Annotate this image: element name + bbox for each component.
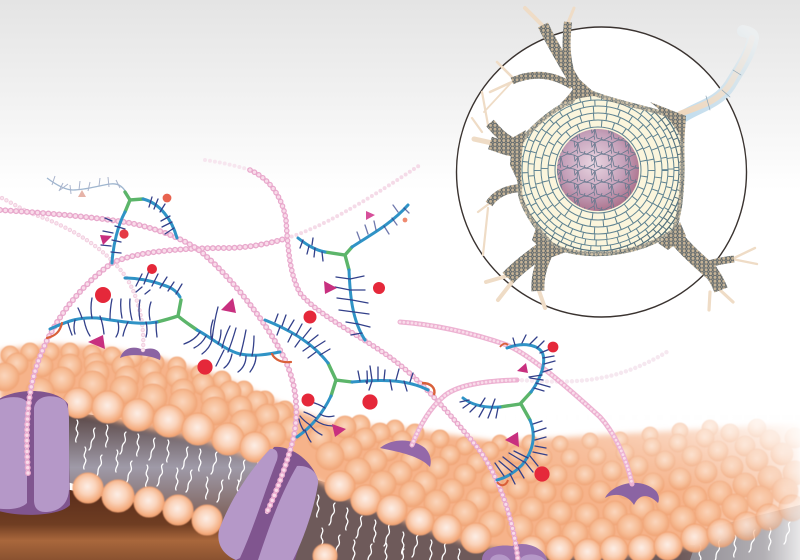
back lipid heads <box>0 343 800 547</box>
lipid tail region <box>60 410 800 560</box>
red ball <box>163 194 171 202</box>
strand six <box>412 380 517 445</box>
cytoplasm under membrane <box>0 490 250 560</box>
clasp <box>47 323 62 338</box>
body rim mesh <box>515 84 685 256</box>
neuron cell body <box>515 84 685 256</box>
red ball <box>147 264 157 274</box>
neuron dendrite tips <box>472 8 757 310</box>
clasp <box>500 344 508 347</box>
faint markers <box>78 190 86 197</box>
neuron dendrites <box>489 22 734 291</box>
lipid tails <box>76 420 790 560</box>
inset circle <box>456 27 746 317</box>
inset: neuron in circle <box>456 8 757 317</box>
magenta triangle <box>332 424 346 437</box>
red ball <box>119 229 129 239</box>
red ball <box>95 287 111 303</box>
red ball <box>362 394 378 410</box>
red ball <box>302 394 314 406</box>
dome protein 3 <box>605 483 659 505</box>
faded beaded strand ends <box>205 160 670 382</box>
glycoprotein A (top left) <box>47 176 177 263</box>
neuron corner flares <box>510 78 686 258</box>
neuron cytoplasm mesh <box>516 90 685 256</box>
red ball <box>197 359 213 375</box>
magenta triangle <box>100 235 112 245</box>
strand four <box>250 170 518 560</box>
faint red ball <box>403 218 407 222</box>
membrane surface backing <box>0 344 800 556</box>
magenta triangle <box>505 432 519 447</box>
faint markers <box>366 211 375 220</box>
channel protein 2 <box>218 447 318 560</box>
neuron nucleus <box>557 129 639 211</box>
channel protein 3 <box>482 544 547 560</box>
strand one <box>0 197 143 350</box>
clasp <box>422 383 434 395</box>
strand two <box>27 238 287 473</box>
magenta triangle <box>517 363 528 373</box>
front and lower lipid heads <box>63 388 800 560</box>
red ball <box>304 310 316 324</box>
glycoprotein D (upper centre) <box>298 205 409 340</box>
top right fade of membrane <box>528 418 800 483</box>
strand five <box>400 322 632 484</box>
clasp <box>497 480 508 485</box>
glycoprotein E (right) <box>460 335 558 485</box>
channel lobes <box>0 396 69 512</box>
strand three <box>0 210 296 512</box>
red ball <box>548 342 558 352</box>
red ball <box>373 282 385 294</box>
glycoprotein B (left) <box>47 264 291 375</box>
lipid bilayer membrane <box>0 343 800 560</box>
dome protein 1 <box>120 348 161 360</box>
channel lobes <box>218 449 318 560</box>
glycoprotein C (centre) <box>265 310 434 442</box>
beaded strands <box>0 170 632 560</box>
magenta triangle <box>221 298 236 313</box>
dome protein 2 <box>380 440 431 467</box>
magenta triangle <box>324 281 337 294</box>
channel protein 1 <box>0 391 70 515</box>
clasp <box>272 354 291 362</box>
neuron axon with myelin sheath <box>680 31 753 116</box>
magenta triangle <box>88 335 105 349</box>
red ball <box>534 466 550 482</box>
